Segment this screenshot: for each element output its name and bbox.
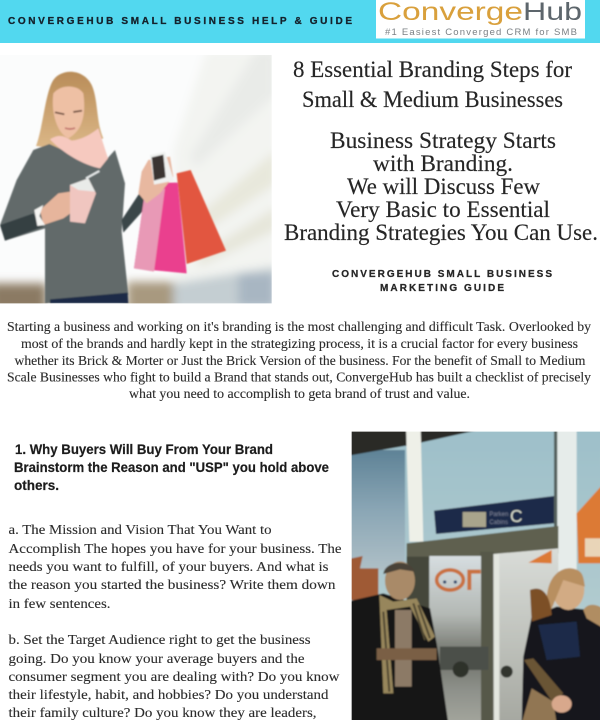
marketing guide caption: MARKETING GUIDE xyxy=(380,283,504,294)
paragraph b: consumer segment you are dealing with? Do you know xyxy=(8,670,340,685)
jeans xyxy=(50,293,128,303)
phone xyxy=(150,152,174,185)
left hand xyxy=(40,190,71,226)
intro paragraph: Scale Businesses who fight to build a Brand that stands out, ConvergeHub has built a checklist of precisely xyxy=(7,370,591,386)
photo: travellers at glass doors xyxy=(347,427,600,720)
logo: #1 Easiest Converged CRM for SMB xyxy=(385,27,577,38)
left traveller xyxy=(347,593,448,720)
reflected orange lettering xyxy=(437,570,463,590)
subheading: We will Discuss Few xyxy=(347,174,540,199)
photo: travellers at glass doors: Parken xyxy=(489,512,508,518)
section heading: others. xyxy=(14,477,59,493)
intro paragraph: whether its Brick & Morter or Just the Brick Version of the business. For the benefit of Small to Medium xyxy=(14,354,586,369)
photo: travellers at glass doors: C xyxy=(510,506,523,526)
header title: CONVERGEHUB SMALL BUSINESS HELP & GUIDE xyxy=(8,16,352,27)
paragraph a: Accomplish The hopes you have for your business. The xyxy=(8,542,342,557)
paragraph b: going. Do you know your average buyers and the xyxy=(8,652,304,667)
paragraph b: b. Set the Target Audience right to get the business xyxy=(8,633,310,648)
hair xyxy=(36,72,103,150)
photo: travellers at glass doors: Cabins xyxy=(489,520,508,526)
paragraph a: a. The Mission and Vision That You Want to xyxy=(8,523,272,538)
section heading xyxy=(14,441,329,493)
paragraph a xyxy=(8,523,342,612)
subheading: Business Strategy Starts xyxy=(330,128,556,153)
marketing guide caption xyxy=(332,269,552,294)
paragraph a: needs you want to fulfill, of your buyers. And what is xyxy=(8,560,328,575)
subheading: with Branding. xyxy=(373,151,513,176)
subheading: Very Basic to Essential xyxy=(336,197,550,222)
door glass xyxy=(429,556,481,720)
face xyxy=(53,86,84,138)
cup xyxy=(70,178,96,223)
logo xyxy=(376,0,585,38)
section heading: 1. Why Buyers Will Buy From Your Brand xyxy=(15,441,273,457)
pink bag xyxy=(134,183,187,273)
marketing guide caption: CONVERGEHUB SMALL BUSINESS xyxy=(332,269,552,280)
intro paragraph: most of the brands and hardly kept in the strategizing process, it is a crucial factor for every business xyxy=(21,337,578,352)
door sign xyxy=(434,496,554,534)
subheading: Branding Strategies You Can Use. xyxy=(284,220,598,245)
headline: Small & Medium Businesses xyxy=(302,87,563,112)
paragraph b: their lifestyle, habit, and hobbies? Do you understand xyxy=(8,688,329,703)
right traveller xyxy=(522,607,600,720)
section heading: Brainstorm the Reason and "USP" you hold above xyxy=(14,459,329,475)
header banner xyxy=(0,0,600,43)
paragraph b xyxy=(8,633,340,720)
photo: woman with shopping bags xyxy=(0,50,277,313)
intro paragraph: what you need to accomplish to geta brand of trust and value. xyxy=(129,387,470,402)
paragraph a: in few sentences. xyxy=(8,597,111,612)
intro paragraph: Starting a business and working on it's branding is the most challenging and difficult Task. Overlooked by xyxy=(7,320,591,335)
headline xyxy=(293,57,572,112)
intro paragraph xyxy=(7,320,591,402)
hand holding phone xyxy=(138,157,173,203)
headline: 8 Essential Branding Steps for xyxy=(293,57,572,82)
scarf xyxy=(50,128,108,168)
door frame xyxy=(407,526,558,562)
subheading xyxy=(284,128,598,245)
paragraph a: the reason you started the business? Write them down xyxy=(8,578,336,593)
red bag xyxy=(177,170,226,264)
sweater body xyxy=(0,144,128,303)
